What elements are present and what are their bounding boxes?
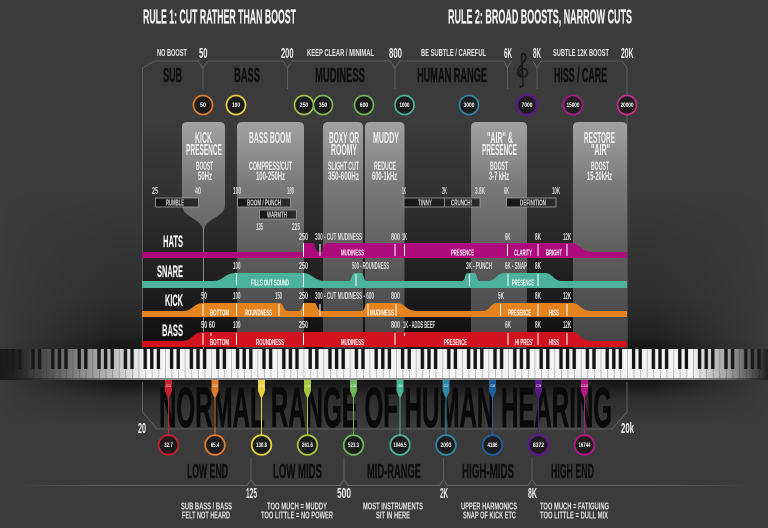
panel text: BASS BOOM — [249, 130, 291, 147]
band: hats: 800 — [391, 232, 400, 243]
band: hats: CLARITY — [514, 248, 532, 258]
band: bass: HI PRES' — [515, 337, 533, 347]
band: bass: 8K — [535, 320, 541, 331]
band: kick: 8K — [535, 291, 541, 302]
bottom zone names: LOW MIDS — [273, 461, 322, 483]
range boxes: 135 — [256, 222, 263, 233]
bottom boundary frequencies: 500 — [337, 486, 351, 502]
panel: restore air — [573, 122, 627, 348]
band: kick: 12K — [563, 291, 571, 302]
text: 20K — [621, 46, 634, 62]
band: hats: 1K — [402, 232, 407, 243]
band: hats: MUDINESS — [341, 248, 364, 258]
band: kick: 100 — [233, 291, 241, 302]
marker: C2 65.4: 65.4 — [211, 443, 220, 449]
hearing range frame — [138, 382, 634, 437]
bottom zone names: HIGH-MIDS — [462, 461, 514, 483]
panel text: "AIR" — [591, 142, 610, 159]
text: RULE 1: CUT RATHER THAN BOOST — [143, 6, 296, 28]
circle: 600: 600 — [360, 103, 369, 109]
band: kick: 50 — [201, 291, 207, 302]
bottom descriptions: MOST INSTRUMENTS — [363, 502, 423, 512]
band: bass: BASS — [162, 321, 183, 340]
marker: C5 523.3: C5 — [351, 383, 357, 388]
bottom descriptions: TOO MUCH = FATIGUING — [540, 502, 609, 512]
header: zone names — [163, 65, 607, 87]
marker: C8 4186 — [483, 380, 502, 455]
panel text — [186, 130, 615, 183]
band: bass: 250 — [299, 320, 308, 331]
marker: C5 523.3: 523.3 — [348, 443, 359, 449]
kick funnel stem line — [203, 228, 204, 349]
circle: 1000 — [395, 96, 414, 114]
range boxes: 6K — [504, 186, 509, 197]
panel text: 15-20kHz — [587, 171, 612, 183]
marker: C3 130.8: 130.8 — [256, 443, 267, 449]
band: snare: 250 — [299, 261, 308, 272]
bottom boundary frequencies: 2K — [440, 486, 448, 502]
panels: problem frequency columns — [182, 122, 627, 348]
panel text: "AIR" & — [487, 130, 513, 147]
box: tinny and crunch: TINNY — [418, 198, 432, 208]
marker: C3 130.8: C3 — [259, 383, 265, 388]
marker: C4 261.6: C4 — [305, 383, 311, 388]
circle: 250: 250 — [300, 103, 309, 109]
marker: C10 16744 — [575, 380, 594, 455]
circle: 20000: 20000 — [620, 103, 634, 109]
band: snare — [142, 261, 627, 288]
range boxes: 40 — [195, 186, 201, 197]
header: range notes: SUBTLE 12K BOOST — [553, 48, 609, 59]
box: warmth — [260, 210, 296, 220]
bottom descriptions: FELT NOT HEARD — [182, 510, 230, 522]
bottom boundary frequencies: 125 — [246, 486, 257, 502]
band: hats: 12K — [563, 232, 571, 243]
panel text: MUDDY — [373, 130, 399, 147]
marker: C10 16744: C10 — [581, 383, 589, 388]
band: snare: 6K - SNAP — [505, 261, 527, 272]
band: bass: 50 60 — [201, 320, 215, 331]
circle: 15000 — [564, 96, 582, 114]
header: range notes: NO BOOST — [157, 48, 187, 59]
bottom zone names: MID-RANGE — [367, 461, 421, 483]
header: range notes: BE SUBTLE / CAREFUL — [421, 48, 486, 59]
panel text: BOOST — [196, 161, 213, 173]
band: bass: ROUNDNESS — [256, 337, 284, 347]
marker: C4 261.6: 261.6 — [302, 443, 313, 449]
panel text: 50Hz — [198, 171, 212, 183]
text: 10K — [552, 186, 560, 197]
band: bass: BOTTOM — [210, 337, 229, 347]
circle: 7000: 7000 — [522, 103, 533, 109]
circle: 350 — [314, 96, 332, 114]
band: bass: 800 — [391, 320, 400, 331]
circle: 250 — [294, 96, 314, 114]
band: bass: 100 — [233, 320, 241, 331]
bottom zone names — [187, 461, 594, 483]
band: bass: 6K — [505, 320, 511, 331]
bottom descriptions: TOO LITTLE = DULL MIX — [540, 510, 608, 522]
band: bass: 1K - ADDS BEEF — [403, 320, 435, 331]
circle: 50 — [194, 96, 212, 114]
box: rumble — [156, 198, 198, 208]
circle: 1000: 1000 — [400, 103, 410, 109]
range boxes: 225 — [292, 222, 300, 233]
box: definition — [506, 198, 556, 208]
panel text: ROOMY — [331, 142, 357, 159]
panel text: 350-600Hz — [328, 171, 359, 183]
bottom descriptions: TOO MUCH = MUDDY — [267, 502, 327, 512]
band: kick: MUDINESS — [370, 308, 394, 318]
marker: C7 2093: 2093 — [440, 443, 452, 449]
bottom boundary frequencies — [246, 486, 537, 502]
range boxes — [152, 186, 560, 233]
header: range notes: 200 — [281, 46, 294, 62]
band: kick: 5K — [498, 291, 504, 302]
header: range notes: 6K — [504, 46, 512, 62]
box: boom / punch: BOOM / PUNCH — [247, 198, 281, 208]
circle: 7000 — [517, 95, 537, 115]
bottom zone names: LOW END — [187, 461, 228, 483]
range boxes: 1K — [402, 186, 406, 197]
marker: C6 1046.5 — [390, 380, 410, 455]
marker: C1 32.7: 32.7 — [164, 443, 173, 449]
hearing range frame: 20 — [138, 421, 146, 437]
band: kick: KICK — [165, 291, 183, 310]
header: zone names: SUB — [163, 65, 182, 87]
band: snare: 100 — [233, 261, 241, 272]
header: zone names: HUMAN RANGE — [417, 65, 487, 87]
header: range notes: 8K — [533, 46, 541, 62]
range boxes: 25 — [152, 186, 158, 197]
circle: 100 — [226, 96, 246, 114]
band: hats — [142, 232, 627, 258]
marker: C9 8372: C9 — [536, 383, 542, 388]
band: bass — [142, 320, 627, 347]
band: kick: BOTTOM — [210, 308, 229, 318]
marker: C4 261.6 — [298, 380, 317, 455]
marker: C7 2093: C7 — [443, 383, 449, 388]
panel: muddy — [365, 122, 404, 348]
range boxes: 3.8K — [475, 186, 485, 197]
box: boom / punch — [238, 198, 290, 208]
piano keyboard — [0, 349, 768, 380]
panel text: BOOST — [490, 161, 508, 173]
panel: bass boom — [237, 122, 304, 348]
circle: 100: 100 — [232, 103, 241, 109]
band: kick: ROUNDNESS — [245, 308, 272, 318]
band: hats: 300 - CUT MUDINESS — [315, 232, 362, 243]
marker: C3 130.8 — [252, 380, 271, 455]
text: HIGH END — [551, 461, 594, 483]
marker: C7 2093 — [436, 380, 456, 455]
band: bass: MUDINESS — [341, 337, 364, 347]
circle: 15000: 15000 — [566, 103, 580, 109]
text: RESTORE — [584, 130, 615, 147]
band: kick — [142, 291, 627, 318]
box: tinny and crunch — [404, 198, 480, 208]
marker: C8 4186: C8 — [490, 383, 496, 388]
header: zone names: BASS — [234, 65, 260, 87]
band: snare: FILLS OUT SOUND — [251, 278, 289, 288]
marker: C2 65.4 — [205, 380, 225, 455]
marker: C6 1046.5: 1046.5 — [394, 443, 407, 449]
panel text: BOOST — [591, 161, 609, 173]
top frequency circles — [194, 95, 636, 115]
icon: treble clef — [517, 54, 528, 87]
marker: C1 32.7 — [159, 380, 178, 455]
panel text: PRESENCE — [186, 142, 222, 159]
band: kick: PRESENCE — [508, 308, 531, 318]
marker: C6 1046.5: C6 — [397, 383, 403, 388]
circle: 3000: 3000 — [464, 103, 475, 109]
range boxes: 2K — [442, 186, 447, 197]
band: kick: 300 - CUT MUDINESS - 600 — [315, 291, 374, 302]
panel text: BOXY OR — [329, 130, 359, 147]
text: HISS / CARE — [554, 65, 607, 87]
inner chart darkening — [142, 120, 627, 348]
header: range notes: 800 — [389, 46, 402, 62]
band: hats: PRESENCE — [451, 248, 474, 258]
panel text: KICK — [195, 130, 212, 147]
box: rumble: RUMBLE — [166, 198, 184, 208]
circle: 3000 — [460, 96, 478, 114]
bottom bracket lines — [20, 457, 748, 486]
marker: C8 4186: 4186 — [488, 443, 498, 449]
band: kick: 150 — [275, 291, 282, 302]
marker: C9 8372 — [528, 380, 548, 455]
bottom descriptions: SIT IN HERE — [376, 510, 410, 522]
range boxes: 100 — [233, 186, 241, 197]
header: frequency brackets — [142, 61, 627, 348]
panel text: 100-250Hz — [256, 171, 285, 183]
panel text: REDUCE — [374, 161, 396, 173]
panel text: 3-7 kHz — [489, 171, 509, 183]
header: range notes: 50 — [199, 46, 208, 62]
circle: 600 — [354, 96, 374, 114]
range boxes: 180 — [287, 186, 294, 197]
band: snare: 3K - PUNCH — [466, 261, 492, 272]
band: snare: SNARE — [157, 262, 183, 281]
panel text: COMPRESS/CUT — [249, 161, 292, 173]
bottom descriptions: SUB BASS / BASS — [181, 502, 232, 512]
band: hats: HATS — [163, 232, 183, 251]
bottom descriptions — [181, 502, 609, 522]
band: hats: 8K — [535, 232, 541, 243]
band: kick: HISS — [549, 308, 559, 318]
marker: C10 16744: 16744 — [578, 443, 591, 449]
band: kick: 800 — [391, 291, 400, 302]
circle: 50: 50 — [200, 103, 207, 109]
piano shadow — [24, 262, 744, 408]
circle: 350: 350 — [319, 103, 328, 109]
band: snare: 500 - ROUNDNESS — [352, 261, 389, 272]
note markers — [159, 380, 594, 455]
header: zone names: MUDINESS — [315, 65, 365, 87]
band: bass: HISS — [549, 337, 559, 347]
marker: C9 8372: 8372 — [533, 443, 545, 449]
panel: air and presence — [471, 122, 527, 348]
panel: boxy or roomy — [323, 122, 363, 348]
panel text: SLIGHT CUT — [328, 161, 359, 173]
band: bass: 12K — [563, 320, 571, 331]
panel text: PRESENCE — [482, 142, 517, 159]
header: range notes — [157, 46, 634, 62]
bottom descriptions: SNAP OF KICK ETC — [463, 510, 516, 522]
panel text: 600-1kHz — [372, 171, 397, 183]
header: range notes: KEEP CLEAR / MINIMAL — [307, 48, 374, 59]
marker: C1 32.7: C1 — [166, 383, 172, 388]
band: snare: 8K — [535, 261, 541, 272]
marker: C5 523.3 — [344, 380, 363, 455]
marker: C2 65.4: C2 — [212, 383, 218, 388]
band: hats: 250 — [299, 232, 308, 243]
band: bass: PRESENCE — [444, 337, 467, 347]
band: hats: 6K — [505, 232, 511, 243]
circle: 20000 — [618, 96, 636, 114]
text: 8K — [528, 486, 537, 502]
panel: kick presence funnel — [182, 122, 225, 232]
bottom descriptions: UPPER HARMONICS — [461, 502, 517, 512]
box: tinny and crunch: CRUNCH! — [451, 198, 472, 208]
band: hats: BRIGHT — [546, 248, 562, 258]
band: snare: PRESENCE — [512, 278, 534, 288]
box: definition: DEFINITION — [520, 198, 546, 208]
band: kick: 250 — [299, 291, 308, 302]
hearing range frame: 20k — [621, 421, 634, 437]
box: warmth: WARMTH — [267, 210, 287, 220]
bottom descriptions: TOO LITTLE = NO POWER — [261, 510, 333, 522]
